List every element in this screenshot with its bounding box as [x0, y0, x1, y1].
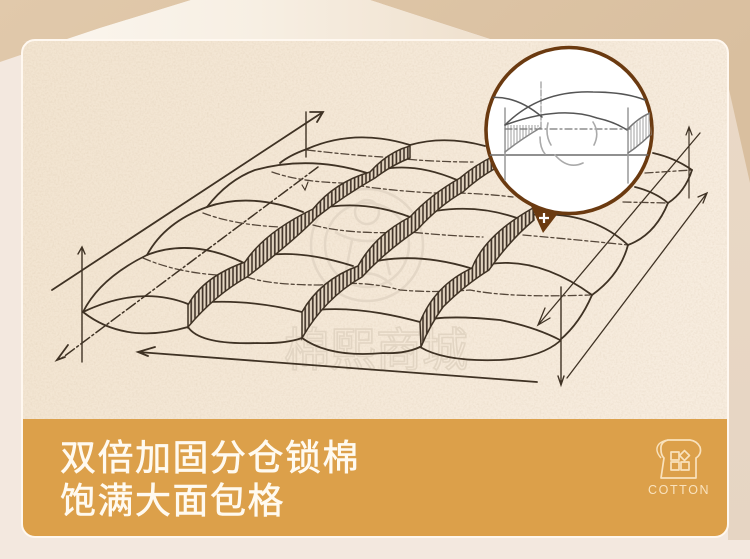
- cotton label: COTTON: [648, 483, 710, 497]
- heading: [60, 437, 360, 521]
- hatched strip 1: [188, 146, 410, 327]
- hatched strip 3: [420, 208, 534, 347]
- magnified detail: [484, 82, 652, 183]
- magnifier callout: [484, 48, 652, 233]
- axis arrows: [52, 112, 707, 385]
- caption band: [22, 419, 728, 537]
- pointer: [531, 206, 559, 233]
- watermark logo: [311, 189, 423, 301]
- quilt line drawing: [52, 112, 707, 385]
- heading: 饱满大面包格: [60, 480, 285, 521]
- watermark text: 棉熙商城: [284, 324, 468, 376]
- plus mark: [539, 213, 549, 223]
- dashed seams: [143, 150, 692, 296]
- paper grain: [23, 41, 727, 419]
- icon: bread with cotton squares: [657, 440, 700, 478]
- heading: 双倍加固分仓锁棉: [60, 437, 360, 478]
- pillow row outlines: [83, 137, 692, 360]
- lens: [486, 48, 652, 214]
- hatched strip 2: [302, 156, 496, 338]
